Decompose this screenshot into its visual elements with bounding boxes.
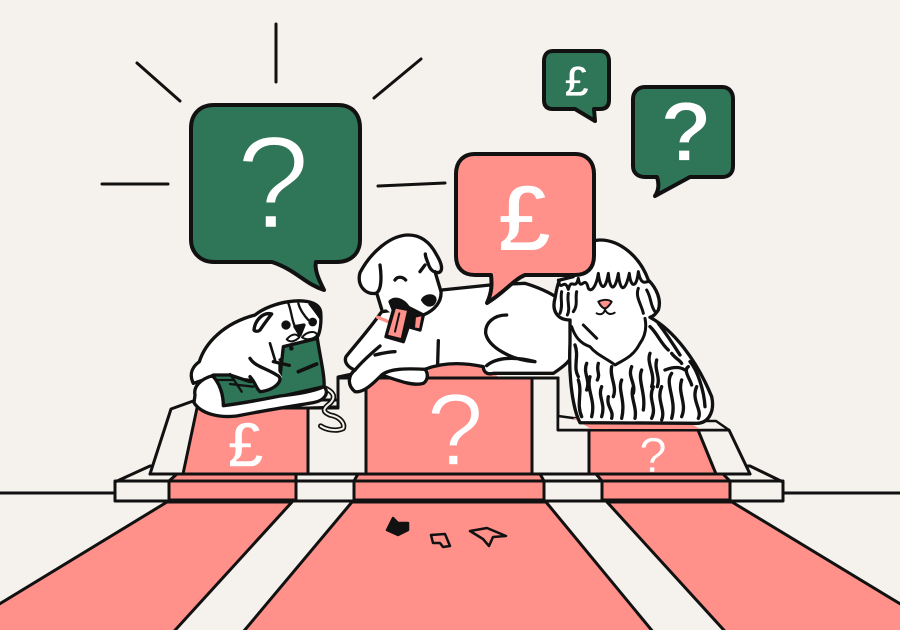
labrador body [345,283,575,392]
question mark on right podium: ? [639,429,667,483]
bulldog face [283,303,320,351]
question mark on centre podium: ? [427,373,483,487]
sneaker sole [194,376,326,417]
bulldog foreleg [213,343,282,392]
bulldog ear [254,314,272,331]
rays of light [102,24,445,186]
pound sign: £ [565,58,589,106]
chewed scraps [387,518,506,547]
bottom plinth [115,466,783,501]
right podium [558,378,750,474]
left podium [150,374,352,474]
pound sign on left podium: £ [228,409,264,481]
fur strands [575,323,705,420]
small green pound bubble [544,51,609,121]
laces [217,374,253,392]
centre podium [308,363,589,474]
bulldog body [191,301,321,383]
question mark: ? [660,85,712,180]
sneaker upper [213,338,324,406]
pink speech bubble [456,154,594,303]
sheepdog [554,240,713,423]
question mark: ? [236,109,310,256]
labrador legs detail [355,315,535,375]
green question bubble [633,85,733,196]
bulldog on shoe [191,301,344,430]
sheepdog body [554,240,713,423]
sheepdog nose and mouth [597,300,615,314]
podium symbols [228,373,667,487]
sheepdog ears [560,288,655,315]
shoelace tail [321,387,344,430]
labrador dog [345,235,575,392]
wallet in mouth [386,299,423,342]
pound sign: £ [499,166,551,272]
carpets [0,502,900,630]
large green speech bubble [191,105,360,290]
beard edge [572,318,646,365]
labrador collar [378,317,390,322]
labrador head [360,235,441,320]
fringe [558,272,650,290]
labrador eye and nose [395,265,435,305]
